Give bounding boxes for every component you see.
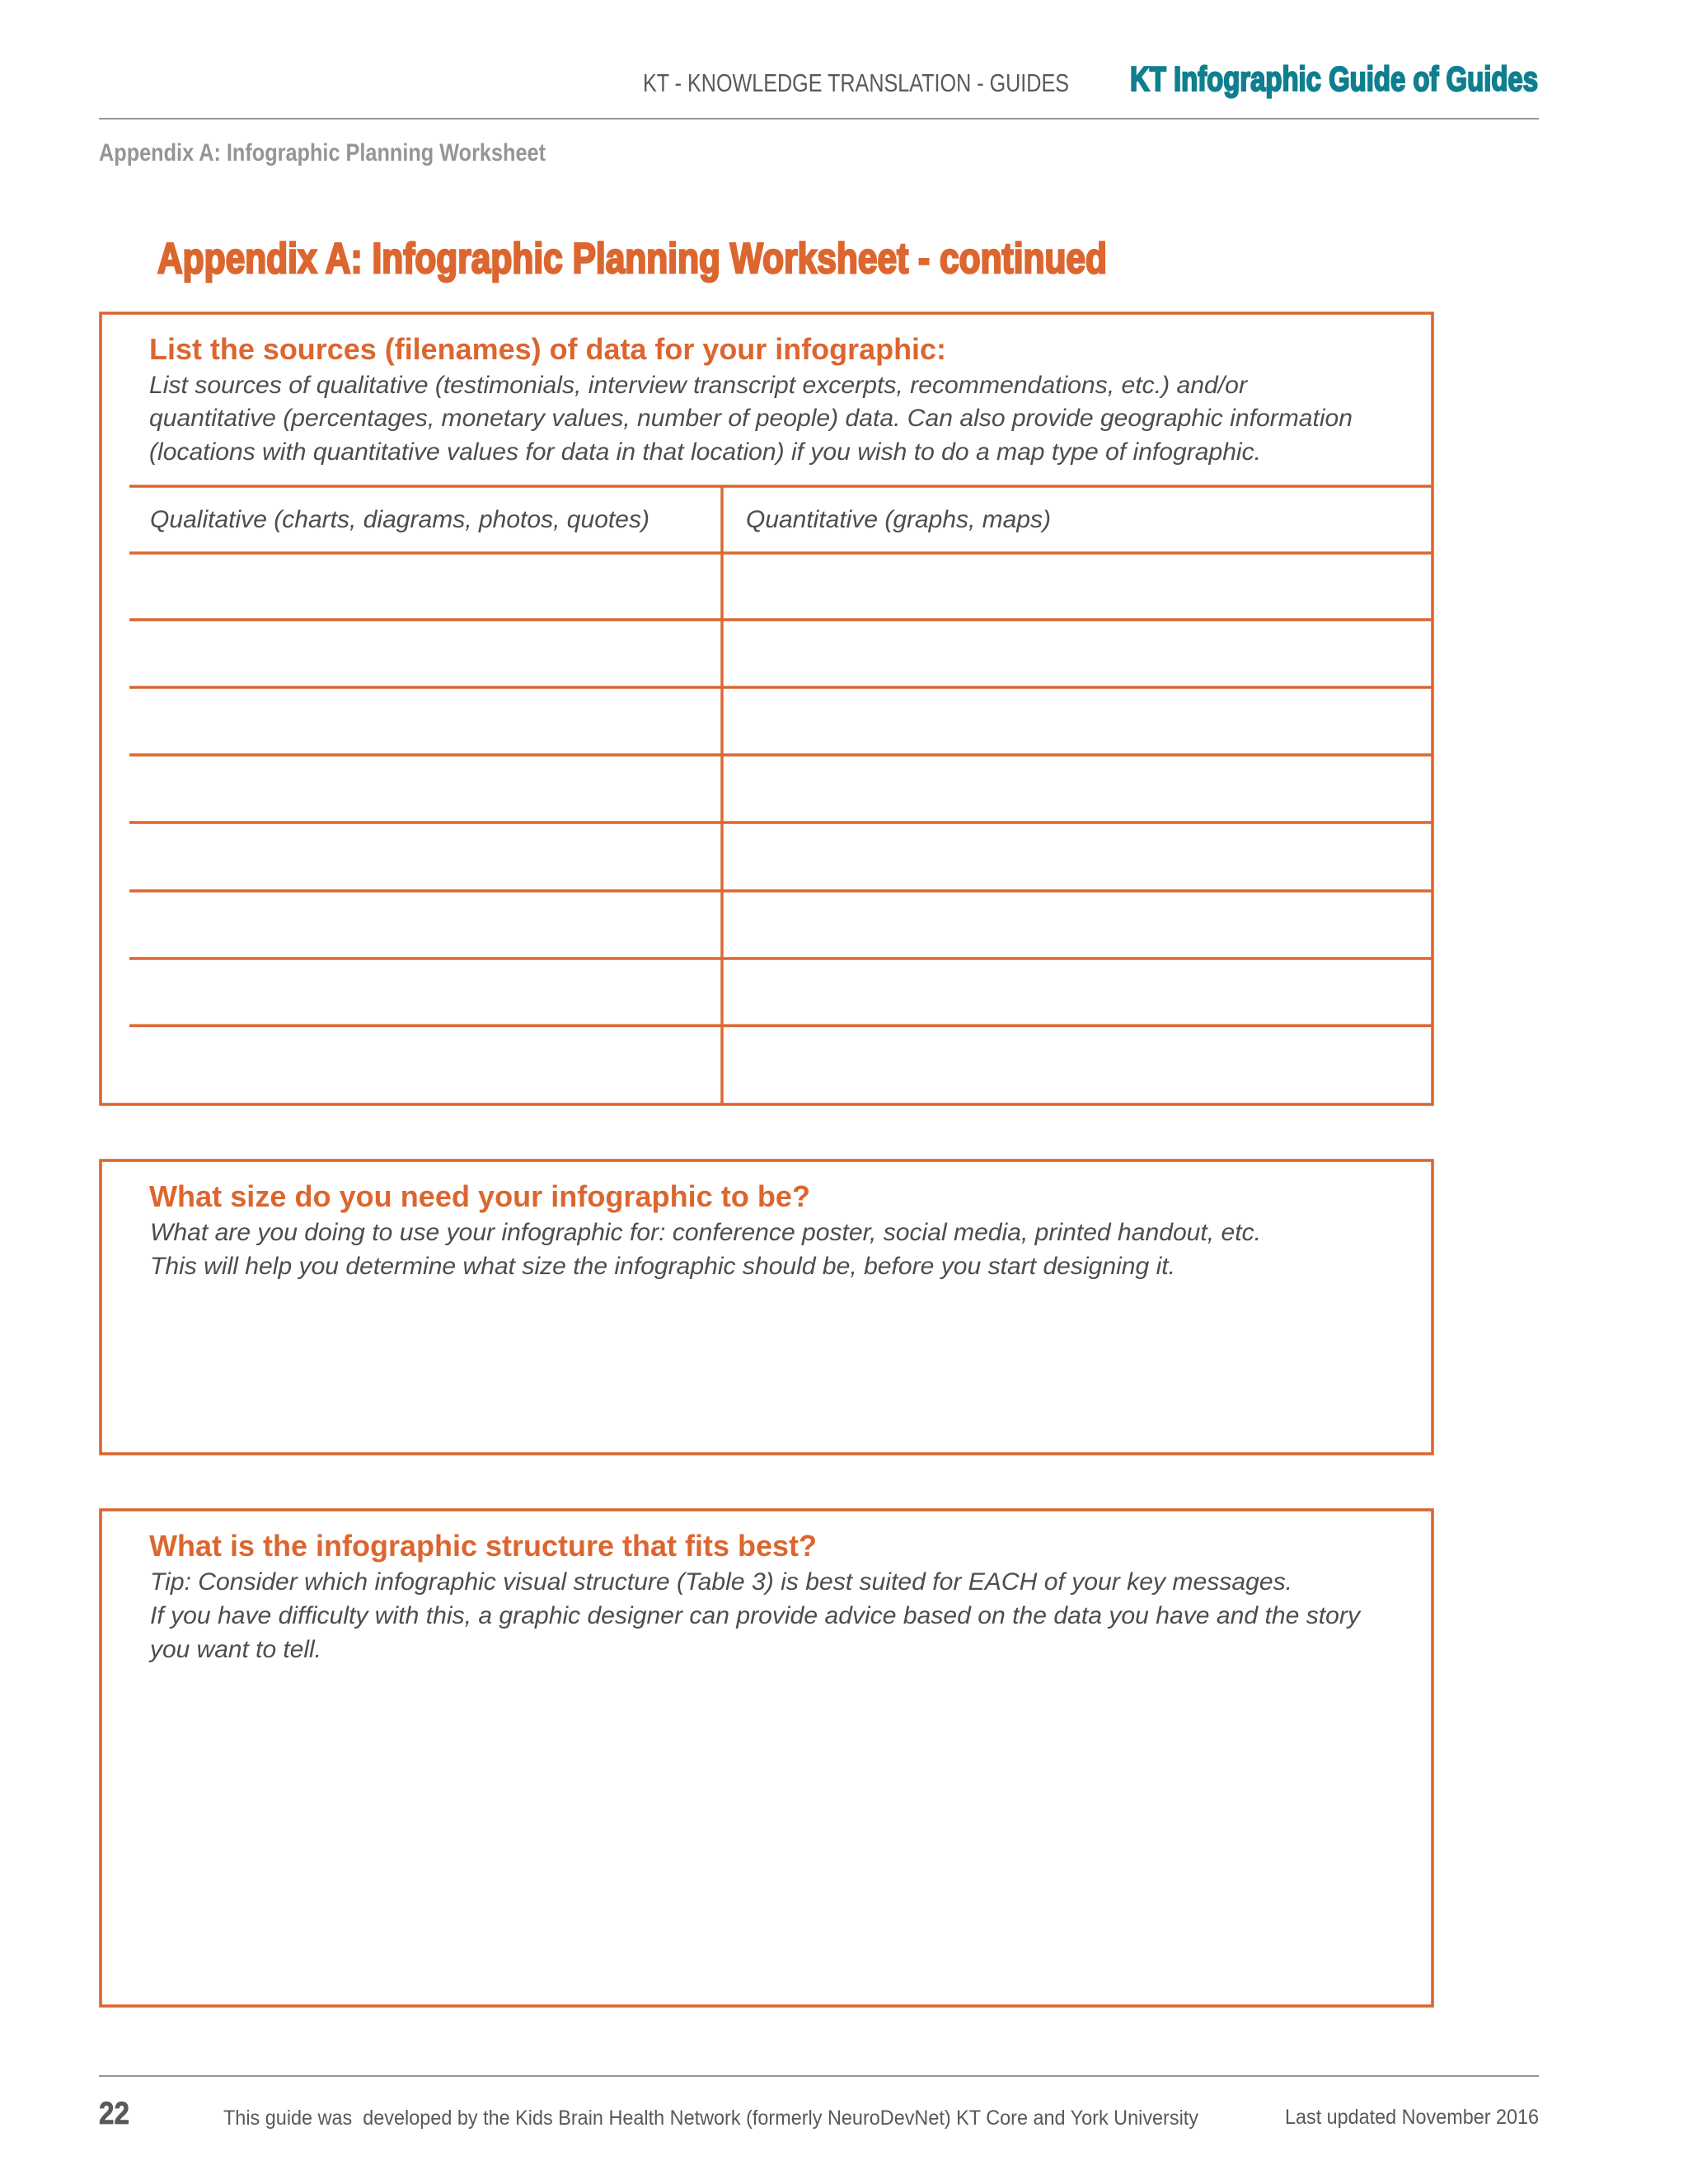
header guide title: KT Infographic Guide of Guides: [1130, 59, 1538, 98]
text block: infographic size instructions: This will help you determine what size the infographic should be, before you start designing it.: [150, 1253, 1175, 1280]
header guide label: KT - KNOWLEDGE TRANSLATION - GUIDES: [643, 68, 1069, 97]
text block: infographic structure tips: you want to tell.: [148, 1636, 321, 1663]
text block: infographic structure tips: [148, 1568, 1362, 1663]
section subtitle: Appendix A: Infographic Planning Worksheet: [99, 139, 546, 166]
text block: infographic structure tips: If you have difficulty with this, a graphic designer can provide advice based on the data you have and the story: [150, 1602, 1362, 1629]
heading: infographic size: What size do you need your infographic to be?: [149, 1179, 810, 1213]
text block: data sources instructions: quantitative (percentages, monetary values, number of people) data. Can also provide geographic information: [149, 405, 1353, 432]
footer credit: This guide was developed by the Kids Brain Health Network (formerly NeuroDevNet) KT Core and York University: [223, 2107, 1198, 2130]
panel: infographic structure: [101, 1510, 1432, 2006]
column header: quantitative: Quantitative (graphs, maps): [746, 506, 1051, 533]
heading: data sources: List the sources (filenames) of data for your infographic:: [149, 332, 946, 366]
text block: infographic structure tips: Tip: Consider which infographic visual structure (Table 3) is best suited for EACH of your key messages.: [150, 1568, 1292, 1596]
heading: infographic structure: What is the infographic structure that fits best?: [149, 1529, 817, 1563]
text block: data sources instructions: [149, 372, 1353, 466]
panel: data sources: [101, 313, 1432, 1104]
page number: 22: [99, 2097, 129, 2131]
text block: data sources instructions: (locations with quantitative values for data in that location) if you wish to do a map type of infographic.: [149, 438, 1261, 466]
footer last updated: Last updated November 2016: [1285, 2106, 1539, 2129]
header: [99, 59, 1539, 119]
column header: qualitative: Qualitative (charts, diagrams, photos, quotes): [150, 506, 649, 533]
text block: data sources instructions: List sources of qualitative (testimonials, interview transcript excerpts, recommendations, etc.) and/or: [149, 372, 1248, 399]
text block: infographic size instructions: What are you doing to use your infographic for: conference poster, social media, printed handout, etc.: [150, 1219, 1261, 1246]
table: sources grid: [129, 486, 1432, 1104]
panel: infographic size: [101, 1160, 1432, 1454]
text block: infographic size instructions: [150, 1219, 1261, 1280]
footer: [99, 2076, 1539, 2131]
page title: Appendix A: Infographic Planning Worksheet - continued: [157, 235, 1107, 283]
